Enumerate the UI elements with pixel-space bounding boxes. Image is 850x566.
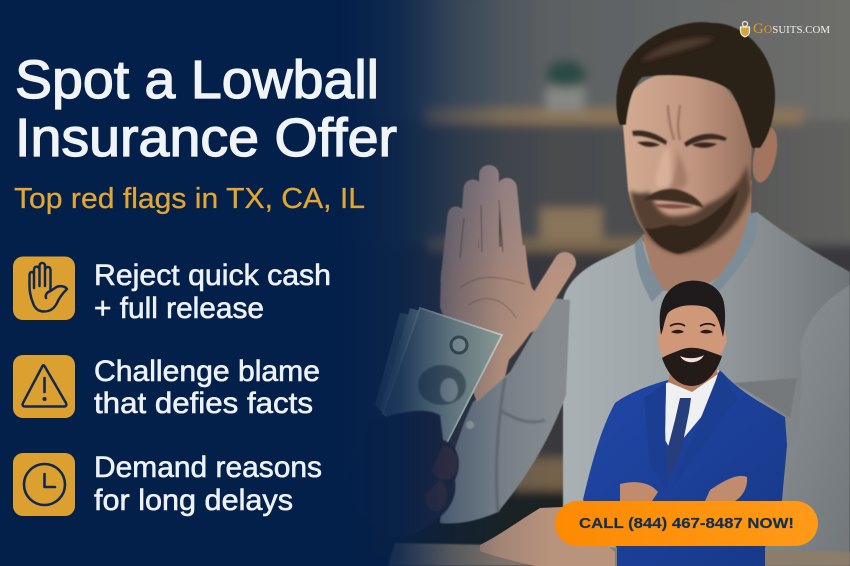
lawyer portrait bbox=[583, 281, 787, 566]
lawyer neck bbox=[668, 365, 718, 392]
hair bbox=[616, 22, 775, 148]
title: Insurance Offer bbox=[15, 108, 397, 168]
beard stubble bbox=[630, 165, 751, 254]
logo: GoSuits bbox=[740, 21, 830, 37]
front bill bbox=[383, 308, 502, 462]
lawyer beard bbox=[662, 348, 722, 386]
lawyer eyebrows bbox=[670, 324, 715, 326]
plant pot bbox=[546, 87, 584, 111]
icon: stop hand bbox=[13, 256, 75, 320]
ring finger bbox=[467, 189, 473, 270]
logo shield icon bbox=[740, 22, 750, 37]
suit bbox=[583, 372, 787, 566]
neck bbox=[642, 180, 752, 295]
logo wordmark: GOSUITS.COM bbox=[753, 21, 830, 37]
lawyer head bbox=[658, 290, 727, 386]
title bbox=[15, 50, 397, 168]
foreground fingers bbox=[425, 445, 458, 512]
subtitle: Top red flags in TX, CA, IL bbox=[14, 183, 365, 215]
icon: warning triangle bbox=[13, 355, 75, 418]
pinky finger bbox=[449, 215, 456, 280]
lawyer smile bbox=[680, 355, 704, 362]
item text: Reject quick cash bbox=[94, 259, 331, 292]
call to action button: CALL (844) 467-8487 NOW! bbox=[579, 516, 794, 532]
item text: for long delays bbox=[94, 484, 293, 517]
finger gaps bbox=[460, 200, 503, 258]
call to action button bbox=[555, 501, 818, 546]
chest pocket bbox=[733, 378, 797, 418]
lapels bbox=[644, 370, 738, 492]
arm on desk area bbox=[388, 507, 850, 566]
eyes bbox=[637, 141, 717, 148]
item: delays bbox=[13, 451, 322, 517]
bills behind bbox=[375, 313, 452, 450]
resting hand bbox=[480, 507, 615, 566]
sleeve: right bbox=[760, 285, 850, 566]
icon: clock bbox=[13, 453, 75, 516]
lawyer eyes bbox=[671, 330, 713, 334]
item text: + full release bbox=[94, 292, 264, 325]
item text: Challenge blame bbox=[94, 355, 320, 388]
collar bbox=[635, 212, 758, 302]
jaw beard bbox=[645, 190, 738, 254]
item text: Demand reasons bbox=[94, 451, 322, 484]
bill portrait face bbox=[440, 378, 458, 402]
plant leaves bbox=[546, 60, 586, 88]
angry man bbox=[440, 22, 850, 566]
forehead frown lines bbox=[668, 105, 680, 140]
mouth bbox=[652, 204, 694, 209]
nose shading bbox=[668, 148, 687, 189]
item text: that defies facts bbox=[94, 387, 313, 420]
eyebrows bbox=[632, 130, 727, 147]
middle finger bbox=[479, 175, 499, 270]
ear bbox=[748, 125, 782, 185]
index finger bbox=[507, 188, 515, 270]
sleeve: raised arm bbox=[440, 298, 570, 523]
wrist and palm bbox=[440, 245, 545, 402]
bill portrait bbox=[418, 365, 466, 405]
lawyer hair bbox=[660, 281, 725, 337]
books bbox=[540, 208, 602, 240]
bill seal bbox=[451, 337, 467, 353]
sleeve fold shading bbox=[496, 378, 545, 512]
sweater body bbox=[563, 212, 850, 566]
cash in foreground hand bbox=[340, 308, 502, 537]
blurred office background bbox=[300, 0, 850, 560]
item: blame bbox=[13, 355, 320, 420]
nose highlight bbox=[655, 148, 672, 188]
shelf: middle bbox=[428, 238, 793, 251]
cuff button bbox=[466, 421, 474, 429]
hair highlight bbox=[640, 37, 715, 62]
desk bbox=[388, 543, 850, 566]
foreground hand bbox=[340, 411, 459, 537]
shirt bbox=[665, 370, 719, 452]
raised stop hand bbox=[440, 175, 565, 402]
item text bbox=[94, 259, 331, 325]
crossed hands bbox=[620, 476, 747, 501]
shelf: lower bbox=[510, 458, 570, 490]
palm creases bbox=[460, 277, 525, 318]
item: quick cash bbox=[13, 256, 331, 325]
title: Spot a Lowball bbox=[15, 50, 379, 110]
item text bbox=[94, 355, 320, 420]
thumb bbox=[528, 263, 565, 322]
shelf: upper bbox=[425, 108, 803, 124]
face bbox=[623, 74, 752, 253]
item text bbox=[94, 451, 322, 517]
moustache bbox=[644, 189, 704, 208]
tie bbox=[666, 398, 691, 480]
